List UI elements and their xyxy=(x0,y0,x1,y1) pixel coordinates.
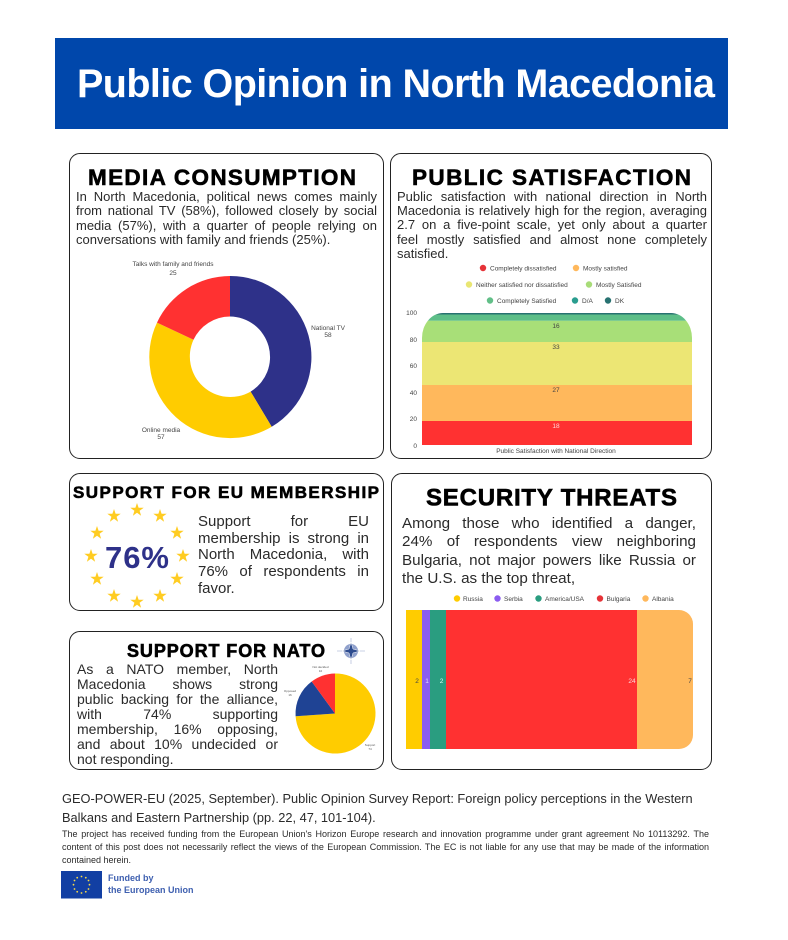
graphics layer xyxy=(61,68,716,898)
legend: security threats: Serbia xyxy=(504,596,523,603)
NATO text xyxy=(77,660,278,767)
donut chart: media consumption: Talks with family and friends xyxy=(133,261,214,268)
stacked bar chart: security threats: 1 xyxy=(425,678,429,685)
pie chart: NATO xyxy=(284,665,376,753)
public satisfaction text: satisfied. xyxy=(397,246,448,261)
citation: Balkans and Eastern Partnership (pp. 22, 47, 101-104). xyxy=(62,810,376,824)
stacked bar chart: public satisfaction: 0 xyxy=(413,443,417,450)
panel: media consumption xyxy=(69,153,384,459)
funding disclaimer: The project has received funding from the European Union's Horizon Europe research and innovation programme under grant agreement No 10113292. The xyxy=(62,829,709,839)
logo: funded by the European Union: the European Union xyxy=(108,885,194,895)
logo: funded by the European Union xyxy=(61,871,194,898)
pie chart: NATO: Support xyxy=(365,743,375,747)
legend: satisfaction: Completely Satisfied xyxy=(497,298,557,305)
legend: satisfaction: DK xyxy=(615,298,625,305)
heading: public satisfaction: PUBLIC SATISFACTION xyxy=(412,165,691,190)
public satisfaction text xyxy=(397,189,707,261)
pie chart: NATO: 74 xyxy=(368,747,372,751)
NATO text: membership, 16% opposing, xyxy=(77,721,278,737)
NATO text: not responding. xyxy=(77,751,174,767)
security threats text: the U.S. as the top threat, xyxy=(402,570,575,587)
EU membership text: Support for EU xyxy=(198,513,369,530)
funding disclaimer: contained herein. xyxy=(62,855,131,865)
EU membership text: 76% of respondents in xyxy=(198,563,369,580)
stacked bar chart: public satisfaction: 16 xyxy=(552,323,560,330)
pie chart: NATO: 10 xyxy=(319,669,322,673)
NATO text: Macedonia shows strong xyxy=(77,676,278,692)
NATO text: As a NATO member, North xyxy=(77,660,278,676)
EU membership text xyxy=(198,513,369,597)
donut chart: media consumption: Online media xyxy=(142,427,181,434)
citation xyxy=(62,791,693,824)
panel: NATO xyxy=(69,631,384,770)
title: Public Opinion in North Macedonia xyxy=(77,62,716,106)
media consumption text xyxy=(76,189,377,247)
stacked bar chart: security threats: 7 xyxy=(688,678,692,685)
76% statistic: 76% xyxy=(105,540,169,575)
heading: NATO: SUPPORT FOR NATO xyxy=(127,641,325,661)
funding disclaimer: content of this post does not necessarily reflect the views of the European Commission. The EC is not liable for any use that may be made of the information xyxy=(62,842,709,852)
heading: EU membership: SUPPORT FOR EU MEMBERSHIP xyxy=(73,483,379,502)
header banner xyxy=(55,38,728,129)
donut chart: media consumption: National TV xyxy=(311,325,346,332)
donut chart: media consumption xyxy=(133,261,346,441)
legend: satisfaction: Completely dissatisfied xyxy=(490,266,557,272)
legend: security threats xyxy=(454,595,674,603)
legend: satisfaction: D/A xyxy=(582,298,594,305)
legend: satisfaction: Neither satisfied nor dissatisfied xyxy=(476,282,568,289)
NATO text: public backing for the alliance, xyxy=(77,691,278,707)
media consumption text: conversations with family and friends (25%). xyxy=(76,232,330,247)
stacked bar chart: security threats: 2 xyxy=(415,678,419,685)
stacked bar chart: public satisfaction: 100 xyxy=(406,310,417,317)
stacked bar chart: public satisfaction: 27 xyxy=(552,387,560,394)
funding disclaimer xyxy=(62,829,709,865)
heading: security threats: SECURITY THREATS xyxy=(426,484,677,512)
panel: public satisfaction xyxy=(390,153,712,459)
icon: EU star ring xyxy=(84,503,190,608)
security threats text xyxy=(402,515,696,587)
legend: security threats: Bulgaria xyxy=(606,596,631,603)
stacked bar chart: security threats: 24 xyxy=(628,678,636,685)
pie chart: NATO: Not decided xyxy=(312,665,329,669)
stacked bar chart: security threats: 2 xyxy=(440,678,444,685)
legend: satisfaction: Mostly satisfied xyxy=(583,266,628,272)
legend: satisfaction: Mostly Satisfied xyxy=(596,282,642,289)
public satisfaction text: Macedonia is relatively high for the region, averaging xyxy=(397,203,707,218)
stacked bar chart: public satisfaction: 80 xyxy=(410,337,417,344)
panel: security threats xyxy=(391,473,712,770)
legend: security threats: Albania xyxy=(652,596,674,603)
stacked bar chart: security threats xyxy=(406,610,693,749)
media consumption text: from national TV (58%), followed closely by social xyxy=(76,203,377,218)
stacked bar chart: public satisfaction: 20 xyxy=(410,416,417,423)
NATO text: and about 10% undecided or xyxy=(77,736,278,752)
logo: funded by the European Union: Funded by xyxy=(108,873,154,883)
legend: security threats: America/USA xyxy=(545,596,585,603)
EU membership text: membership is strong in xyxy=(198,530,369,547)
public satisfaction text: Public satisfaction with national direction in North xyxy=(397,189,707,204)
icon: NATO compass xyxy=(337,638,365,664)
security threats text: 24% of respondents view neighboring xyxy=(402,533,696,550)
media consumption text: In North Macedonia, political news comes mainly xyxy=(76,189,377,204)
security threats text: Among those who identified a danger, xyxy=(402,515,696,532)
donut chart: media consumption: 25 xyxy=(169,270,177,277)
legend: security threats: Russia xyxy=(463,596,483,603)
public satisfaction text: feel mostly satisfied and almost none completely xyxy=(397,232,707,247)
stacked bar chart: public satisfaction xyxy=(406,310,692,455)
stacked bar chart: public satisfaction: 18 xyxy=(552,423,560,430)
legend: satisfaction xyxy=(466,265,642,305)
stacked bar chart: public satisfaction: 60 xyxy=(410,363,417,370)
heading: media consumption: MEDIA CONSUMPTION xyxy=(88,165,356,190)
EU membership text: favor. xyxy=(198,580,235,597)
stacked bar chart: public satisfaction: Public Satisfaction with National Direction xyxy=(496,448,616,455)
stacked bar chart: public satisfaction: 40 xyxy=(410,390,417,397)
pie chart: NATO: 16 xyxy=(288,693,292,697)
EU membership text: North Macedonia, with xyxy=(198,546,369,563)
panel: EU membership xyxy=(69,473,384,611)
security threats text: Bulgaria, not major powers like Russia or xyxy=(402,552,696,569)
public satisfaction text: 2.7 on a five-point scale, yet only about a quarter xyxy=(397,217,707,232)
NATO text: with 74% supporting xyxy=(77,706,278,722)
donut chart: media consumption: 58 xyxy=(324,332,332,339)
pie chart: NATO: Opposed xyxy=(284,689,296,693)
donut chart: media consumption: 57 xyxy=(157,434,165,441)
stacked bar chart: public satisfaction: 33 xyxy=(552,344,560,351)
citation: GEO-POWER-EU (2025, September). Public Opinion Survey Report: Foreign policy perceptions in the Western xyxy=(62,791,693,806)
media consumption text: media (57%), with a quarter of people relying on xyxy=(76,218,377,233)
